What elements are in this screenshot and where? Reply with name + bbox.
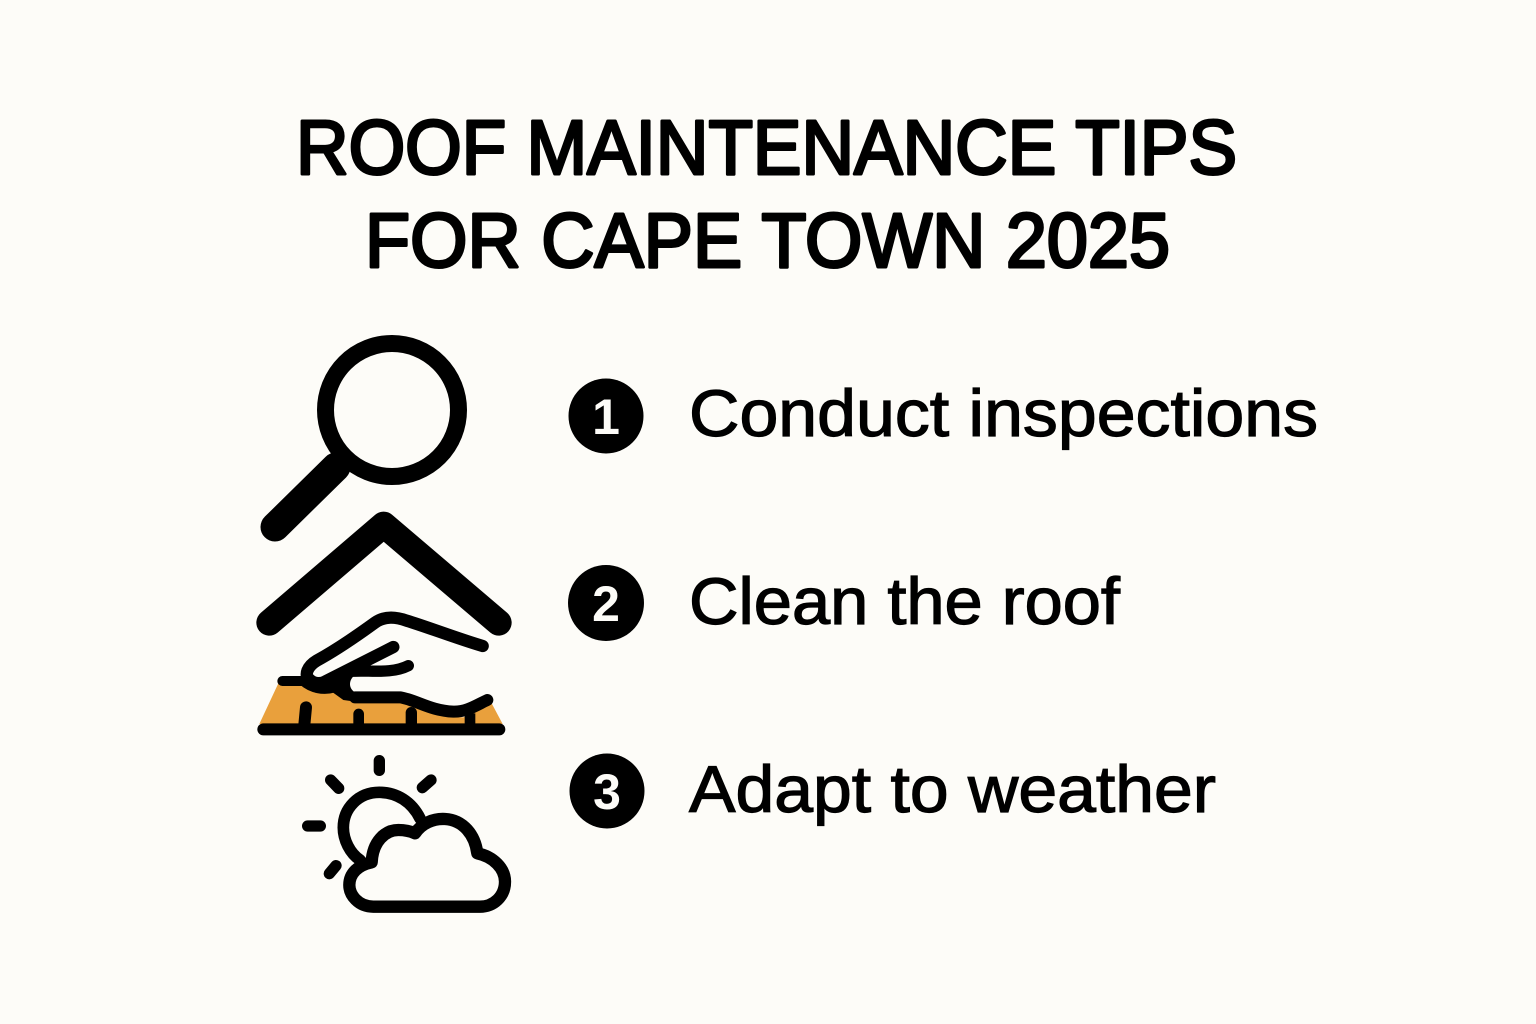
title: FOR CAPE TOWN 2025 [365,198,1170,284]
lower hand edge [355,697,487,712]
roof outline [269,525,499,623]
roof tiles [259,683,503,724]
icon: magnifying glass [275,344,458,527]
sun rays [308,761,431,874]
number badge 2 [568,565,644,641]
icon: roof with cleaning hand [259,525,503,729]
title [296,105,1237,284]
sun [343,792,420,860]
palm fill [315,668,355,702]
number badge 3 [570,754,644,828]
cloud [349,819,505,907]
icon: sun and cloud [308,761,505,907]
step 2 [568,564,1121,641]
label 2: Clean the roof [689,564,1121,638]
title: ROOF MAINTENANCE TIPS [296,105,1237,191]
step 1 [568,376,1318,454]
base line [263,711,499,747]
number badge 1: 1 [592,389,620,445]
label 3: Adapt to weather [689,752,1216,826]
label 1: Conduct inspections [689,376,1318,450]
lower finger [340,666,408,674]
number badge 2: 2 [592,576,620,632]
step 3 [570,752,1216,828]
hand [307,618,483,683]
number badge 3: 3 [593,764,621,820]
tile ledge [282,681,335,689]
tile ridges [304,707,306,728]
number badge 1 [568,378,644,454]
